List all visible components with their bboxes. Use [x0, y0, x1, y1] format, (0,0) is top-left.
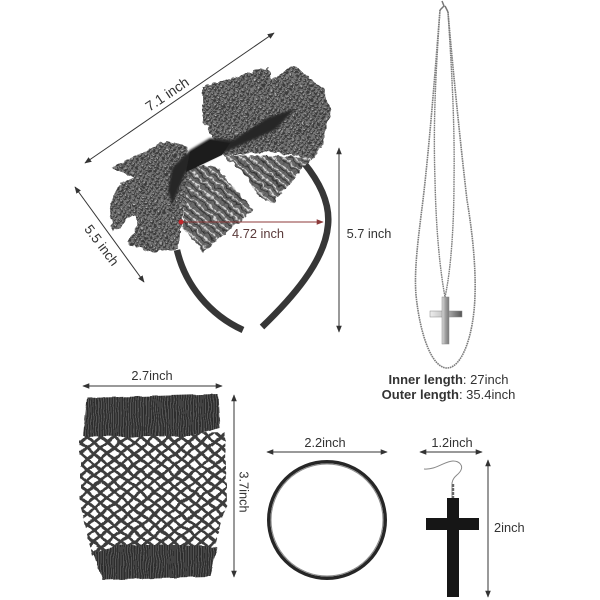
bow lower centre tail — [182, 165, 253, 252]
dimension: bow height 5.5 inch — [75, 187, 144, 282]
bangle bracelet — [269, 462, 385, 578]
dimension: bangle diameter 2.2 inch — [267, 435, 387, 452]
mesh body — [80, 432, 227, 558]
bottom cuff — [93, 545, 217, 580]
dimension: headband height 5.7 inch: 5.7 inch — [347, 226, 391, 241]
bow left underlay — [122, 150, 192, 240]
top cuff — [83, 394, 220, 437]
dimension: earring width 1.2 inch — [420, 435, 482, 452]
lace bow — [109, 65, 331, 252]
cross pendant — [430, 297, 462, 344]
dimension: earring width 1.2 inch: 1.2inch — [431, 435, 473, 450]
black cross — [426, 498, 479, 597]
dimension: glove height 3.7 inch: 3.7inch — [237, 471, 252, 513]
dimension: headband width 4.72 inch: 4.72 inch — [232, 226, 284, 241]
bow left upper lobe — [112, 140, 188, 177]
dimension: bow height 5.5 inch: 5.5 inch — [81, 222, 122, 269]
headband with lace bow — [109, 65, 331, 330]
outer chain — [415, 10, 475, 368]
dimension: glove width 2.7 inch: 2.7inch — [131, 368, 173, 383]
necklace length labels: Outer length: 35.4inch — [382, 387, 515, 402]
bow lower right tail — [223, 155, 313, 203]
cross necklace — [415, 1, 475, 368]
chain link — [452, 484, 454, 498]
dimension: earring height 2 inch — [488, 460, 525, 597]
dimension: bangle diameter 2.2 inch: 2.2inch — [304, 435, 346, 450]
necklace length labels — [382, 372, 515, 402]
dimension: headband width 4.72 inch — [178, 220, 323, 241]
dimension: bow width 7.1 inch: 7.1 inch — [142, 74, 192, 114]
fishnet glove — [80, 394, 227, 580]
inner chain — [434, 10, 454, 297]
bow upper right lobe — [202, 65, 331, 158]
dimension: glove width 2.7 inch — [83, 368, 222, 386]
clasp — [440, 1, 448, 12]
bow left middle lobe — [109, 170, 173, 232]
bow knot and gathers — [168, 108, 296, 205]
cross earring — [424, 461, 479, 597]
headband arc — [177, 163, 328, 330]
dimension: bow width 7.1 inch — [85, 33, 274, 163]
hook — [424, 461, 462, 498]
necklace length labels: Inner length: 27inch — [389, 372, 508, 387]
dimension: earring height 2 inch: 2inch — [494, 520, 525, 535]
bow lower left tail — [127, 187, 182, 252]
